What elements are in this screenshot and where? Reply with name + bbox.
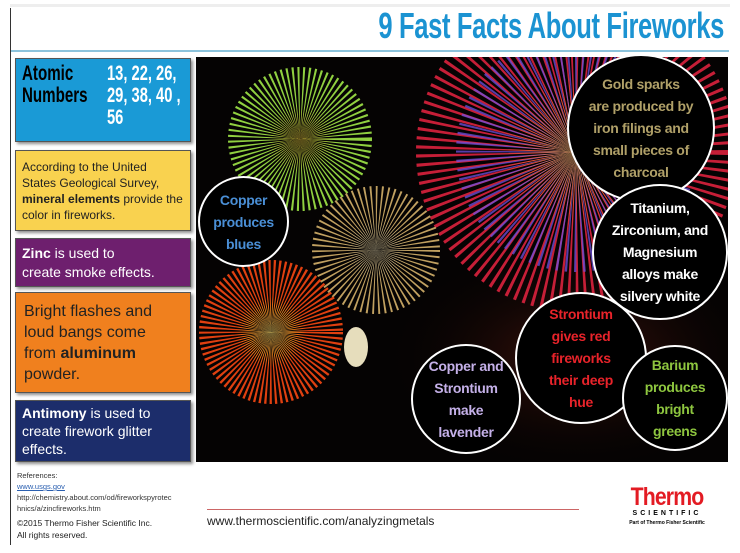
box: atomic numbers: Atomic — [22, 62, 73, 85]
circle: titanium: Zirconium, and — [612, 222, 708, 238]
box: zinc: Zinc is used to — [22, 245, 115, 261]
box: antimony — [15, 400, 191, 462]
green burst — [264, 103, 336, 175]
circle: barium: greens — [653, 423, 697, 439]
gold burst — [344, 218, 408, 282]
title: 9 Fast Facts About Fireworks — [378, 5, 724, 46]
box: USGS — [15, 150, 191, 231]
copyright — [17, 518, 152, 540]
circle: copper blues — [198, 176, 289, 267]
box: zinc — [15, 238, 191, 287]
circle: lavender: Strontium — [434, 380, 498, 396]
circle: gold sparks: small pieces of — [593, 142, 689, 158]
circle: barium: bright — [656, 401, 694, 417]
references: http://chemistry.about.com/od/fireworkspyrotec hnics/a/zincfireworks.htm — [17, 493, 172, 513]
circle: barium — [622, 345, 728, 451]
logo: Part of Thermo Fisher Scientific — [629, 520, 705, 526]
fireworks photo — [196, 57, 728, 462]
box: aluminum: Bright flashes and loud bangs come from aluminum powder. — [24, 303, 152, 383]
box: aluminum — [15, 292, 191, 393]
box: antimony: Antimony is used to create firework glitter effects. — [22, 405, 152, 457]
circle: gold sparks: charcoal — [613, 164, 669, 180]
circle: lavender: Copper and — [429, 358, 503, 374]
circle: titanium — [592, 184, 728, 320]
circle: strontium — [515, 292, 647, 424]
circle: gold sparks: Gold sparks — [602, 76, 680, 92]
circle: strontium: hue — [569, 394, 593, 410]
circle: copper blues: blues — [226, 236, 261, 252]
website: www.thermoscientific.com/analyzingmetals — [207, 514, 434, 528]
circle: strontium: Strontium — [549, 306, 613, 322]
logo: SCIENTIFIC — [633, 510, 701, 517]
box: atomic numbers: Numbers — [22, 84, 88, 107]
logo: Thermo — [631, 483, 703, 511]
box: atomic numbers: 56 — [107, 106, 123, 129]
circle: strontium: their deep — [549, 372, 613, 388]
circle: titanium: silvery white — [620, 288, 700, 304]
box: atomic numbers: 13, 22, 26, — [107, 62, 176, 85]
references: References: — [17, 471, 57, 480]
circle: gold sparks — [567, 54, 715, 202]
circle: lavender: make — [449, 402, 483, 418]
circle: barium: produces — [645, 379, 705, 395]
references — [17, 471, 172, 513]
circle: gold sparks: iron filings and — [593, 120, 689, 136]
circle: titanium: alloys make — [622, 266, 698, 282]
box: atomic numbers: 29, 38, 40 , — [107, 84, 181, 107]
references: www.usgs.gov — [17, 482, 65, 491]
logo — [629, 483, 705, 526]
circle: titanium: Titanium, — [630, 200, 690, 216]
box: USGS: According to the United States Geological Survey, mineral elements provide the color in fireworks. — [22, 160, 183, 222]
box: zinc: create smoke effects. — [22, 264, 155, 280]
circle: barium: Barium — [652, 357, 698, 373]
box: atomic numbers — [15, 58, 191, 142]
orange burst — [235, 296, 307, 368]
circle: strontium: gives red — [552, 328, 610, 344]
circle: titanium: Magnesium — [623, 244, 697, 260]
circle: lavender: lavender — [438, 424, 494, 440]
circle: copper blues: Copper — [220, 192, 267, 208]
circle: copper blues: produces — [213, 214, 274, 230]
circle: strontium: fireworks — [551, 350, 611, 366]
copyright: All rights reserved. — [17, 530, 87, 540]
big red burst — [496, 72, 656, 232]
copyright: ©2015 Thermo Fisher Scientific Inc. — [17, 518, 152, 528]
circle: lavender — [411, 344, 521, 454]
circle: gold sparks: are produced by — [589, 98, 693, 114]
